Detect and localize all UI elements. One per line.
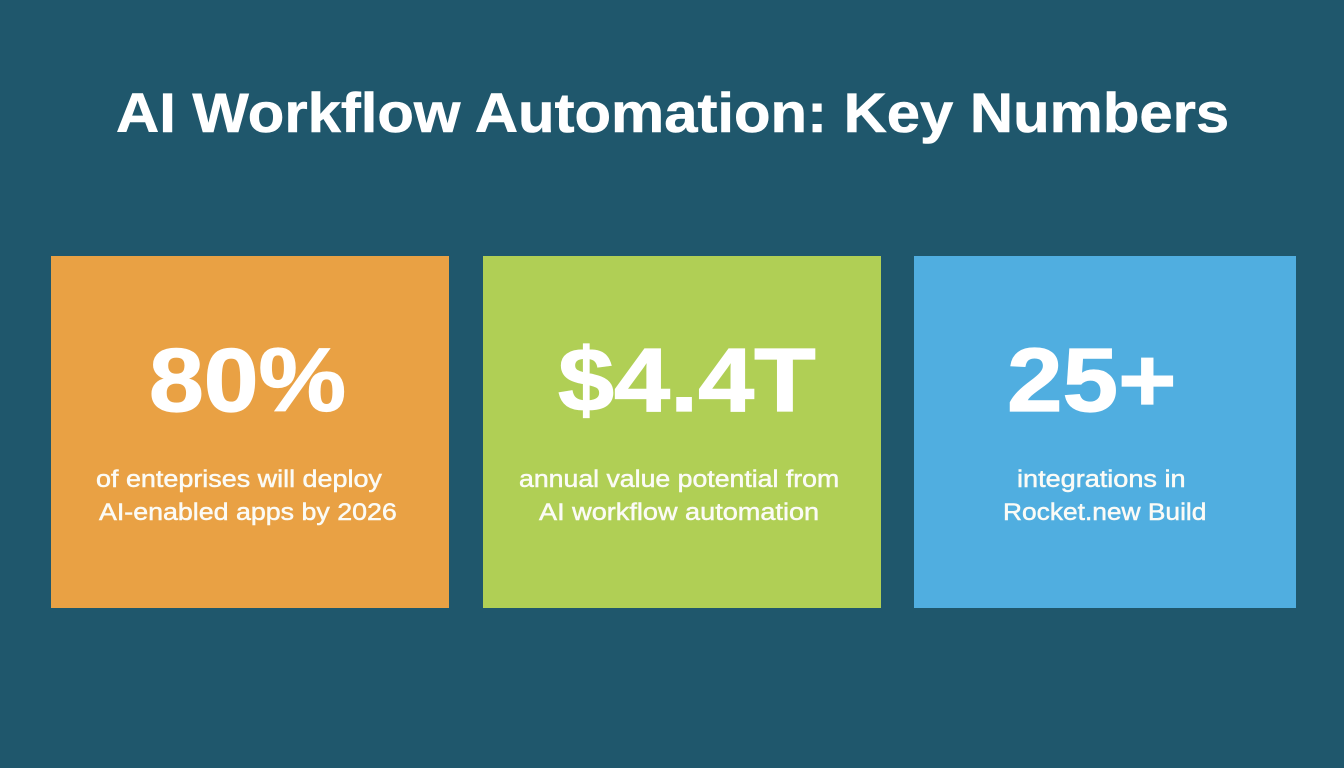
description: annual value: AI workflow automation (539, 499, 819, 526)
stat number: 25+: 25+ (1007, 331, 1176, 431)
description: integrations (1003, 466, 1206, 526)
description: enterprises: of enteprises will deploy (96, 466, 382, 493)
description: integrations: integrations in (1017, 466, 1186, 493)
description: integrations: Rocket.new Build (1003, 499, 1206, 526)
panel: $4.4T stat (483, 256, 881, 608)
description: enterprises: AI-enabled apps by 2026 (99, 499, 397, 526)
stat number: 80%: 80% (149, 331, 346, 431)
stat number: $4.4T: $4.4T (558, 331, 816, 431)
description: enterprises (96, 466, 397, 526)
panel: 25+ stat (914, 256, 1296, 608)
title: AI Workflow Automation: Key Numbers (116, 80, 1229, 144)
description: annual value: annual value potential from (519, 466, 839, 493)
panel: 80% stat (51, 256, 449, 608)
description: annual value (519, 466, 839, 526)
